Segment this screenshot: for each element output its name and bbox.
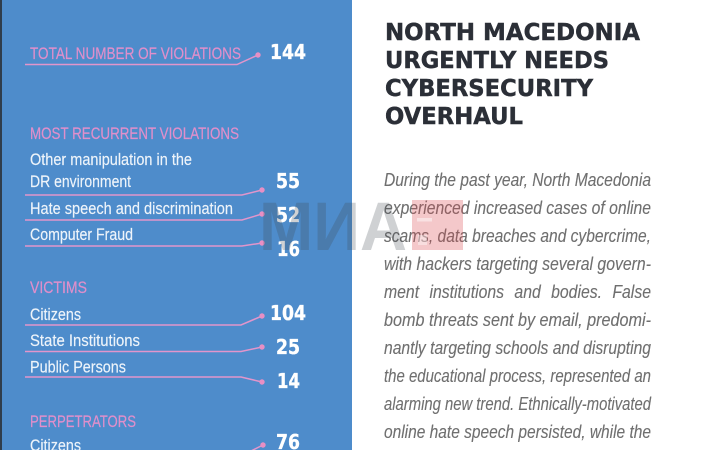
body text: experienced increased cases of online bbox=[384, 197, 651, 218]
section: most recurrent violations: Other manipulation in the bbox=[30, 151, 192, 169]
title: CYBERSECURITY bbox=[385, 76, 593, 102]
watermark: МИА bbox=[259, 188, 407, 265]
section: victims bbox=[25, 279, 306, 393]
total number of violations: 144 bbox=[270, 40, 306, 64]
title bbox=[385, 20, 640, 130]
title: URGENTLY NEEDS bbox=[385, 48, 609, 74]
body text: During the past year, North Macedonia bbox=[384, 169, 651, 190]
section: victims: Citizens bbox=[30, 306, 81, 324]
section: most recurrent violations: 16 bbox=[277, 237, 300, 261]
section: victims: 104 bbox=[270, 301, 306, 325]
total number of violations: TOTAL NUMBER OF VIOLATIONS bbox=[30, 45, 241, 63]
section: most recurrent violations: Hate speech and discrimination bbox=[30, 200, 233, 218]
section: perpetrators: PERPETRATORS bbox=[30, 413, 136, 431]
body text: the educational process, represented an bbox=[384, 365, 651, 386]
body text: ment institutions and bodies. False bbox=[384, 281, 651, 302]
section: perpetrators bbox=[25, 413, 300, 450]
body text: alarming new trend. Ethnically-motivated bbox=[384, 393, 652, 414]
section: most recurrent violations: Computer Fraud bbox=[30, 226, 133, 244]
section: victims: VICTIMS bbox=[30, 279, 87, 297]
body text: with hackers targeting several govern- bbox=[384, 253, 651, 274]
body text: scams, data breaches and cybercrime, bbox=[384, 225, 651, 246]
title: NORTH MACEDONIA bbox=[385, 20, 640, 46]
body text: nantly targeting schools and disrupting bbox=[384, 337, 652, 358]
body text: online hate speech persisted, while the bbox=[384, 421, 651, 442]
section: victims: Public Persons bbox=[30, 358, 126, 376]
total number of violations bbox=[25, 40, 306, 64]
section: victims: 14 bbox=[277, 369, 300, 393]
panel: statistics bbox=[2, 0, 352, 450]
section: victims: 25 bbox=[276, 335, 300, 359]
title: OVERHAUL bbox=[385, 104, 523, 130]
body text: bomb threats sent by email, predomi- bbox=[384, 309, 651, 330]
section: most recurrent violations: 55 bbox=[276, 169, 300, 193]
section: most recurrent violations: 52 bbox=[276, 203, 300, 227]
body text bbox=[384, 169, 652, 442]
section: victims: State Institutions bbox=[30, 332, 140, 350]
section: most recurrent violations bbox=[25, 125, 300, 261]
section: most recurrent violations: MOST RECURRENT VIOLATIONS bbox=[30, 125, 239, 143]
section: most recurrent violations: DR environment bbox=[30, 173, 131, 191]
